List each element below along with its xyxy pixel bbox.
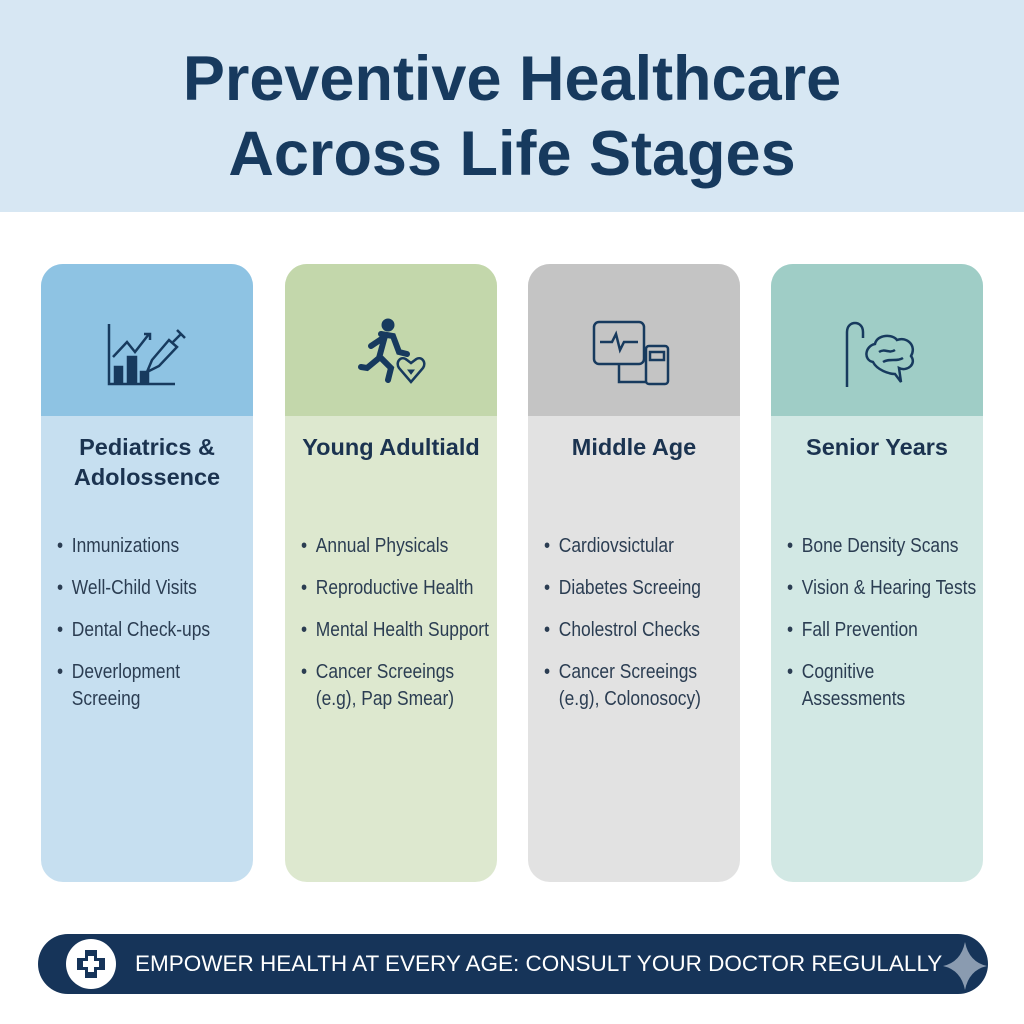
title bbox=[183, 44, 841, 189]
panel: pediatrics bbox=[41, 264, 253, 882]
bullet list: Cancer Screeings bbox=[559, 661, 697, 683]
heading: Adolossence bbox=[74, 464, 220, 490]
bullet list: Annual Physicals bbox=[316, 535, 448, 557]
bullet list: Assessments bbox=[802, 688, 905, 710]
icon: medical cross bbox=[66, 939, 116, 989]
bullet list: (e.g), Pap Smear) bbox=[316, 688, 454, 710]
panel: senior bbox=[771, 264, 983, 882]
bullet list: (e.g), Colonosocy) bbox=[559, 688, 701, 710]
heading: Young Adultiald bbox=[302, 434, 480, 460]
bullet list: Fall Prevention bbox=[802, 619, 918, 641]
banner text: EMPOWER HEALTH AT EVERY AGE: CONSULT YOUR DOCTOR REGULALLY bbox=[135, 951, 942, 976]
bullet list: Vision & Hearing Tests bbox=[802, 577, 976, 599]
banner bbox=[38, 934, 988, 994]
title: Across Life Stages bbox=[228, 119, 796, 189]
bullet list: Well-Child Visits bbox=[72, 577, 197, 599]
bullet list: Screeing bbox=[72, 688, 140, 710]
heading: Middle Age bbox=[572, 434, 696, 460]
title: Preventive Healthcare bbox=[183, 44, 841, 114]
bullet list bbox=[302, 535, 489, 710]
bullet list bbox=[788, 535, 976, 710]
bullet list: Inmunizations bbox=[72, 535, 179, 557]
heading bbox=[74, 434, 220, 490]
panel: young adult bbox=[285, 264, 497, 882]
panel: middle age bbox=[528, 264, 740, 882]
bullet list: Reproductive Health bbox=[316, 577, 473, 599]
icon: cane and brain bbox=[846, 322, 914, 387]
icon: sparkle bbox=[943, 942, 987, 990]
heading: Pediatrics & bbox=[79, 434, 215, 460]
heading: Senior Years bbox=[806, 434, 948, 460]
icon: monitor bbox=[592, 320, 670, 386]
icon: runner and heart bbox=[358, 318, 426, 384]
bullet list: Dental Check-ups bbox=[72, 619, 210, 641]
bullet list: Deverlopment bbox=[72, 661, 180, 683]
bullet list: Cardiovsictular bbox=[559, 535, 674, 557]
bullet list: Bone Density Scans bbox=[802, 535, 958, 557]
header band bbox=[0, 0, 1024, 212]
bullet list: Diabetes Screeing bbox=[559, 577, 701, 599]
bullet list bbox=[544, 535, 701, 710]
icon: chart and syringe bbox=[108, 324, 186, 386]
bullet list: Cancer Screeings bbox=[316, 661, 454, 683]
bullet list: Cognitive bbox=[802, 661, 874, 683]
bullet list bbox=[58, 535, 210, 710]
bullet list: Cholestrol Checks bbox=[559, 619, 700, 641]
bullet list: Mental Health Support bbox=[316, 619, 489, 641]
